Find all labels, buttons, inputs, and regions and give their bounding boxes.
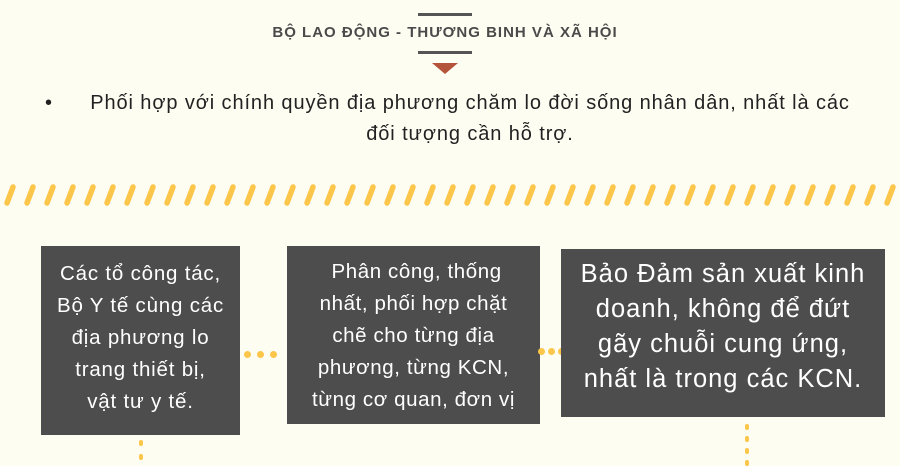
connector dots 2 [538,348,561,355]
connector dots 1 [244,351,277,358]
box 2: nhất, phối hợp chặt [320,292,507,315]
box 2: Phân công, thống [331,260,502,283]
vertical connector right [745,424,749,466]
box 1: trang thiết bị, [75,358,206,381]
bullet text: • [45,92,53,114]
box 2: phương, từng KCN, [318,356,509,379]
bullet text: Phối hợp với chính quyền địa phương chăm lo đời sống nhân dân, nhất là các [90,92,850,114]
stripes [4,184,896,206]
box 3: nhất là trong các KCN. [584,365,862,393]
box 1: Các tổ công tác, [60,262,221,285]
box 3: Bảo Đảm sản xuất kinh [581,260,865,288]
box 1: địa phương lo [72,326,209,349]
bullet text: đối tượng cần hỗ trợ. [366,123,574,145]
box 2 [287,246,540,424]
box 3: doanh, không để đứt [596,295,850,323]
title [272,13,618,74]
box 1: Bộ Y tế cùng các [57,294,224,317]
box 1 [41,246,240,435]
box 3: gãy chuỗi cung ứng, [598,330,848,358]
title: BỘ LAO ĐỘNG - THƯƠNG BINH VÀ XÃ HỘI [272,24,618,41]
icon: triangle [432,63,458,74]
box 1: vật tư y tế. [87,390,194,413]
box 3 [561,249,885,417]
vertical connector left [139,440,143,460]
bullet text [45,92,850,145]
box 2: từng cơ quan, đơn vị [312,388,515,411]
box 2: chẽ cho từng địa [332,324,495,347]
